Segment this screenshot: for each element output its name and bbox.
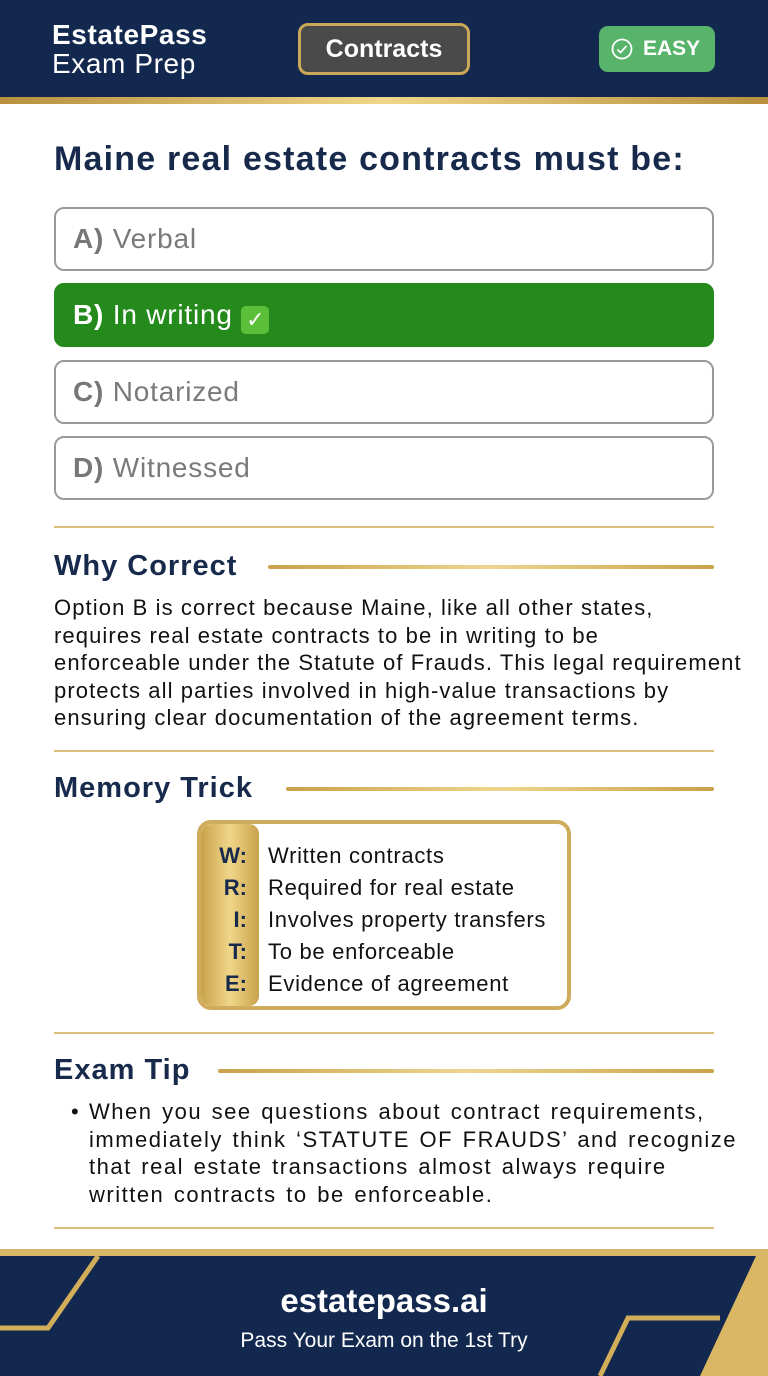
question title: Maine real estate contracts must be: [54,140,685,178]
header [0,0,768,104]
heading: exam tip: Exam Tip [54,1054,190,1086]
exam tip text: written contracts to be enforceable. [89,1182,493,1206]
heading: why correct: Why Correct [54,550,237,582]
option C [54,360,714,424]
heading: memory trick: Memory Trick [54,772,253,804]
option B correct: ✓ [246,307,265,332]
mnemonic box [197,820,571,1010]
mnemonic letters: I: [234,907,247,932]
exam tip text: immediately think ‘STATUTE OF FRAUDS’ and recognize [89,1126,737,1152]
option A [54,207,714,271]
footer site: estatepass.ai [280,1282,488,1319]
why correct text: requires real estate contracts to be in writing to be [54,622,599,648]
mnemonic letters: E: [225,971,247,996]
brand: EstatePass [52,19,207,50]
mnemonic letters [201,824,259,1006]
option B correct: B) In writing [73,299,233,330]
mnemonic words: Evidence of agreement [268,971,509,996]
brand [52,19,207,79]
footer [0,1249,768,1376]
exam tip text: that real estate transactions almost always require [89,1154,667,1179]
category badge [298,23,470,75]
mnemonic words: Involves property transfers [268,907,546,932]
exam tip text [71,1099,737,1206]
why correct text [54,595,742,730]
mnemonic letters: W: [219,843,247,868]
option A: A) Verbal [73,223,197,254]
mnemonic words: Written contracts [268,843,445,868]
exam tip text: When you see questions about contract requirements, [89,1099,705,1124]
footer tagline: Pass Your Exam on the 1st Try [240,1329,528,1352]
why correct text: enforceable under the Statute of Frauds. This legal requirement [54,650,742,675]
mnemonic words: To be enforceable [268,939,455,964]
mnemonic words: Required for real estate [268,875,515,900]
option B correct [54,283,714,347]
mnemonic letters: R: [224,875,247,900]
brand: Exam Prep [52,48,196,79]
why correct text: protects all parties involved in high-value transactions by [54,678,669,702]
difficulty badge: EASY [643,37,700,60]
option D [54,436,714,500]
mnemonic words [268,843,546,996]
why correct text: Option B is correct because Maine, like all other states, [54,595,654,620]
option D: D) Witnessed [73,452,251,483]
option C: C) Notarized [73,376,240,407]
difficulty badge [599,26,715,72]
text: • [71,1099,80,1124]
mnemonic letters: T: [229,939,247,964]
why correct text: ensuring clear documentation of the agreement terms. [54,705,640,730]
category badge: Contracts [326,35,442,63]
